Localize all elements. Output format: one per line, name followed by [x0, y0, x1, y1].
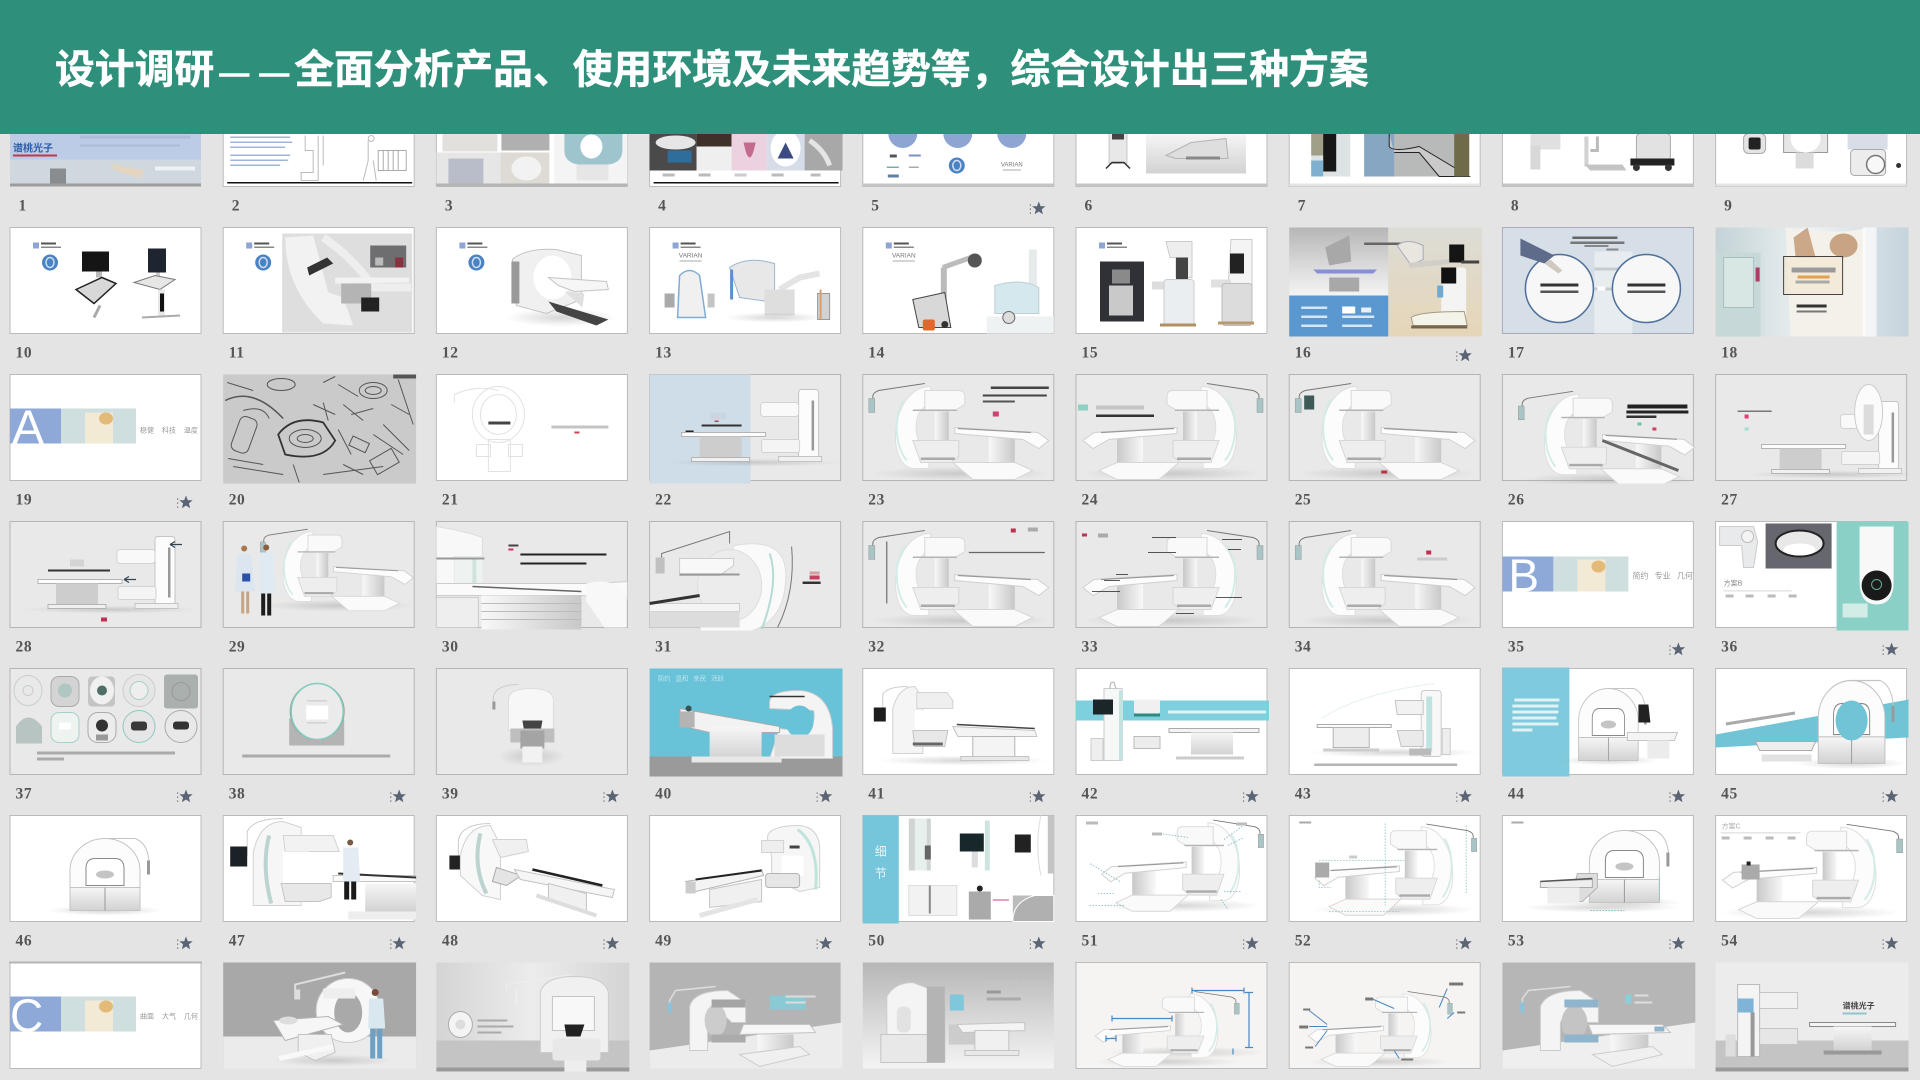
title: 设计调研— —全面分析产品、使用环境及未来趋势等，综合设计出三种方案: [55, 48, 1369, 92]
slide 53: [1502, 816, 1693, 950]
number 35: 35: [1508, 638, 1525, 656]
slide 62: [1502, 962, 1695, 1068]
slide 13: [650, 228, 841, 362]
number 49: 49: [655, 932, 672, 950]
slide 6: [1076, 134, 1268, 210]
star: [603, 790, 619, 802]
number 53: 53: [1508, 932, 1525, 950]
number 7: 7: [1298, 198, 1306, 214]
star: [1883, 936, 1898, 949]
slide 29: [223, 522, 415, 656]
number 26: 26: [1508, 492, 1525, 508]
star: [817, 790, 832, 802]
slide 51: [1076, 816, 1267, 950]
slide 31: [650, 522, 841, 656]
number 9: 9: [1724, 198, 1732, 214]
slide 19: 稳健 科技 温度: [140, 426, 198, 434]
number 13: 13: [655, 344, 672, 362]
slide 41: [863, 668, 1054, 802]
slide 1: 谱桃光子: [13, 142, 53, 154]
number 18: 18: [1721, 344, 1738, 362]
slide 45: [1716, 668, 1909, 802]
number 43: 43: [1295, 786, 1311, 802]
number 47: 47: [229, 932, 245, 950]
star: [177, 936, 193, 949]
slide 56: [223, 962, 416, 1068]
number 17: 17: [1508, 344, 1525, 362]
slide 18: [1716, 228, 1909, 362]
number 30: 30: [442, 638, 459, 656]
slide 24: [1076, 374, 1267, 508]
slide 35: [1502, 522, 1693, 656]
slide 8: [1502, 134, 1694, 210]
slide 5: VARIAN: [1001, 162, 1023, 168]
slide 5: [862, 134, 1054, 214]
slide 17: [1502, 228, 1693, 362]
star: [1030, 790, 1046, 802]
slide 40: [650, 668, 843, 802]
slide 9: [1715, 134, 1908, 210]
number 19: 19: [16, 492, 32, 508]
slide 47: [223, 816, 416, 950]
number 37: 37: [16, 786, 32, 802]
number 34: 34: [1295, 638, 1311, 656]
number 5: 5: [871, 198, 880, 214]
star: [1030, 202, 1046, 214]
number 29: 29: [229, 638, 245, 656]
slide 27: [1716, 374, 1920, 508]
slide 49: [650, 816, 841, 950]
number 14: 14: [868, 344, 885, 362]
star: [390, 936, 406, 949]
number 51: 51: [1082, 932, 1098, 950]
number 21: 21: [442, 492, 459, 508]
number 2: 2: [232, 198, 240, 214]
slide 59: LESS IS MORE: [985, 978, 1048, 988]
slide 28: [10, 522, 201, 656]
star: [1883, 790, 1898, 802]
number 20: 20: [229, 492, 245, 508]
star: [177, 790, 193, 802]
number 6: 6: [1084, 198, 1093, 214]
star: [1669, 642, 1685, 655]
number 24: 24: [1082, 492, 1098, 508]
slide 60: [1076, 962, 1267, 1068]
number 23: 23: [868, 492, 885, 508]
slide 54: 方案C: [1722, 822, 1741, 830]
number 11: 11: [229, 344, 245, 362]
number 16: 16: [1295, 344, 1311, 362]
slide 19: A: [12, 402, 44, 454]
slide 55: [9, 962, 202, 1068]
number 25: 25: [1295, 492, 1311, 508]
slide 32: [863, 522, 1054, 656]
number 12: 12: [442, 344, 459, 362]
number 10: 10: [16, 344, 32, 362]
number 54: 54: [1721, 932, 1738, 950]
number 39: 39: [442, 786, 459, 802]
number 15: 15: [1082, 344, 1098, 362]
slide 21: [436, 374, 627, 508]
number 1: 1: [18, 198, 27, 214]
slide 35: 简约 专业 几何: [1632, 570, 1693, 580]
slide 43: [1289, 668, 1480, 802]
slide 42: [1076, 668, 1269, 802]
slide 22: [650, 374, 842, 508]
star: [1243, 936, 1259, 949]
number 42: 42: [1082, 786, 1098, 802]
slide 61: [1289, 962, 1480, 1068]
slide 2: [222, 134, 415, 210]
star: [390, 790, 406, 802]
slide 46: [10, 816, 201, 950]
star: [1243, 790, 1259, 802]
slide 30: [436, 522, 627, 656]
star: [1669, 790, 1685, 802]
slide 52: [1289, 816, 1480, 950]
star: [817, 936, 832, 949]
slide 4: [649, 134, 842, 210]
number 3: 3: [445, 198, 453, 214]
star: [1456, 936, 1472, 949]
number 48: 48: [442, 932, 459, 950]
star: [603, 936, 619, 949]
slide 54: [1716, 816, 1907, 950]
slide 14: VARIAN: [892, 252, 916, 260]
number 41: 41: [868, 786, 885, 802]
star: [1883, 642, 1898, 655]
slide 35: B: [1508, 550, 1539, 602]
slide 40: 简约 温和 亲民 活跃: [658, 674, 725, 682]
slide 16: [1289, 228, 1482, 362]
number 22: 22: [655, 492, 672, 508]
star: [177, 496, 193, 508]
number 38: 38: [229, 786, 245, 802]
slide 63: 谱桃光子: [1843, 1000, 1875, 1010]
slide 7: [1288, 134, 1481, 210]
number 8: 8: [1511, 198, 1519, 214]
number 50: 50: [868, 932, 885, 950]
slide 39: [436, 668, 627, 802]
slide 50: [863, 816, 1054, 950]
slide 14: [863, 228, 1054, 362]
header banner: [0, 0, 1920, 134]
number 44: 44: [1508, 786, 1525, 802]
slide 59: [863, 962, 1054, 1068]
star: [1456, 790, 1472, 802]
star: [1030, 936, 1046, 949]
slide 34: [1289, 522, 1480, 656]
number 40: 40: [655, 786, 672, 802]
slide 48: [436, 816, 627, 950]
slide 55: C: [10, 990, 43, 1042]
number 27: 27: [1721, 492, 1738, 508]
slide 12: [436, 228, 627, 362]
slide 25: [1289, 374, 1480, 508]
slide 58: [650, 962, 843, 1068]
number 31: 31: [655, 638, 672, 656]
slide 55: 曲面 大气 几何: [140, 1012, 198, 1020]
slide 10: [10, 228, 201, 362]
number 36: 36: [1721, 638, 1738, 656]
slide 57: [436, 962, 629, 1072]
number 28: 28: [16, 638, 32, 656]
star: [1669, 936, 1685, 949]
slide 36: [1716, 522, 1909, 656]
number 4: 4: [658, 198, 666, 214]
slide 26: [1502, 374, 1697, 508]
slide 3: [436, 134, 628, 210]
slide 13: VARIAN: [679, 252, 703, 260]
slide 19: [10, 374, 201, 508]
number 32: 32: [868, 638, 885, 656]
slide 33: [1076, 522, 1267, 656]
slide 36: 方案B: [1724, 578, 1743, 588]
slide 50: 节: [875, 866, 887, 880]
slide 37: [10, 668, 201, 802]
slide 44: [1502, 666, 1693, 802]
slide 38: [223, 668, 414, 802]
slide 15: [1076, 228, 1267, 362]
number 52: 52: [1295, 932, 1311, 950]
slide 23: [863, 374, 1054, 508]
slide 50: 细: [875, 844, 887, 858]
slide 1: [10, 134, 201, 210]
star: [1456, 348, 1472, 361]
slide 11: [223, 228, 414, 362]
slide 63: [1716, 962, 1909, 1072]
slide 20: [223, 374, 416, 508]
number 33: 33: [1082, 638, 1098, 656]
number 46: 46: [16, 932, 32, 950]
number 45: 45: [1721, 786, 1738, 802]
